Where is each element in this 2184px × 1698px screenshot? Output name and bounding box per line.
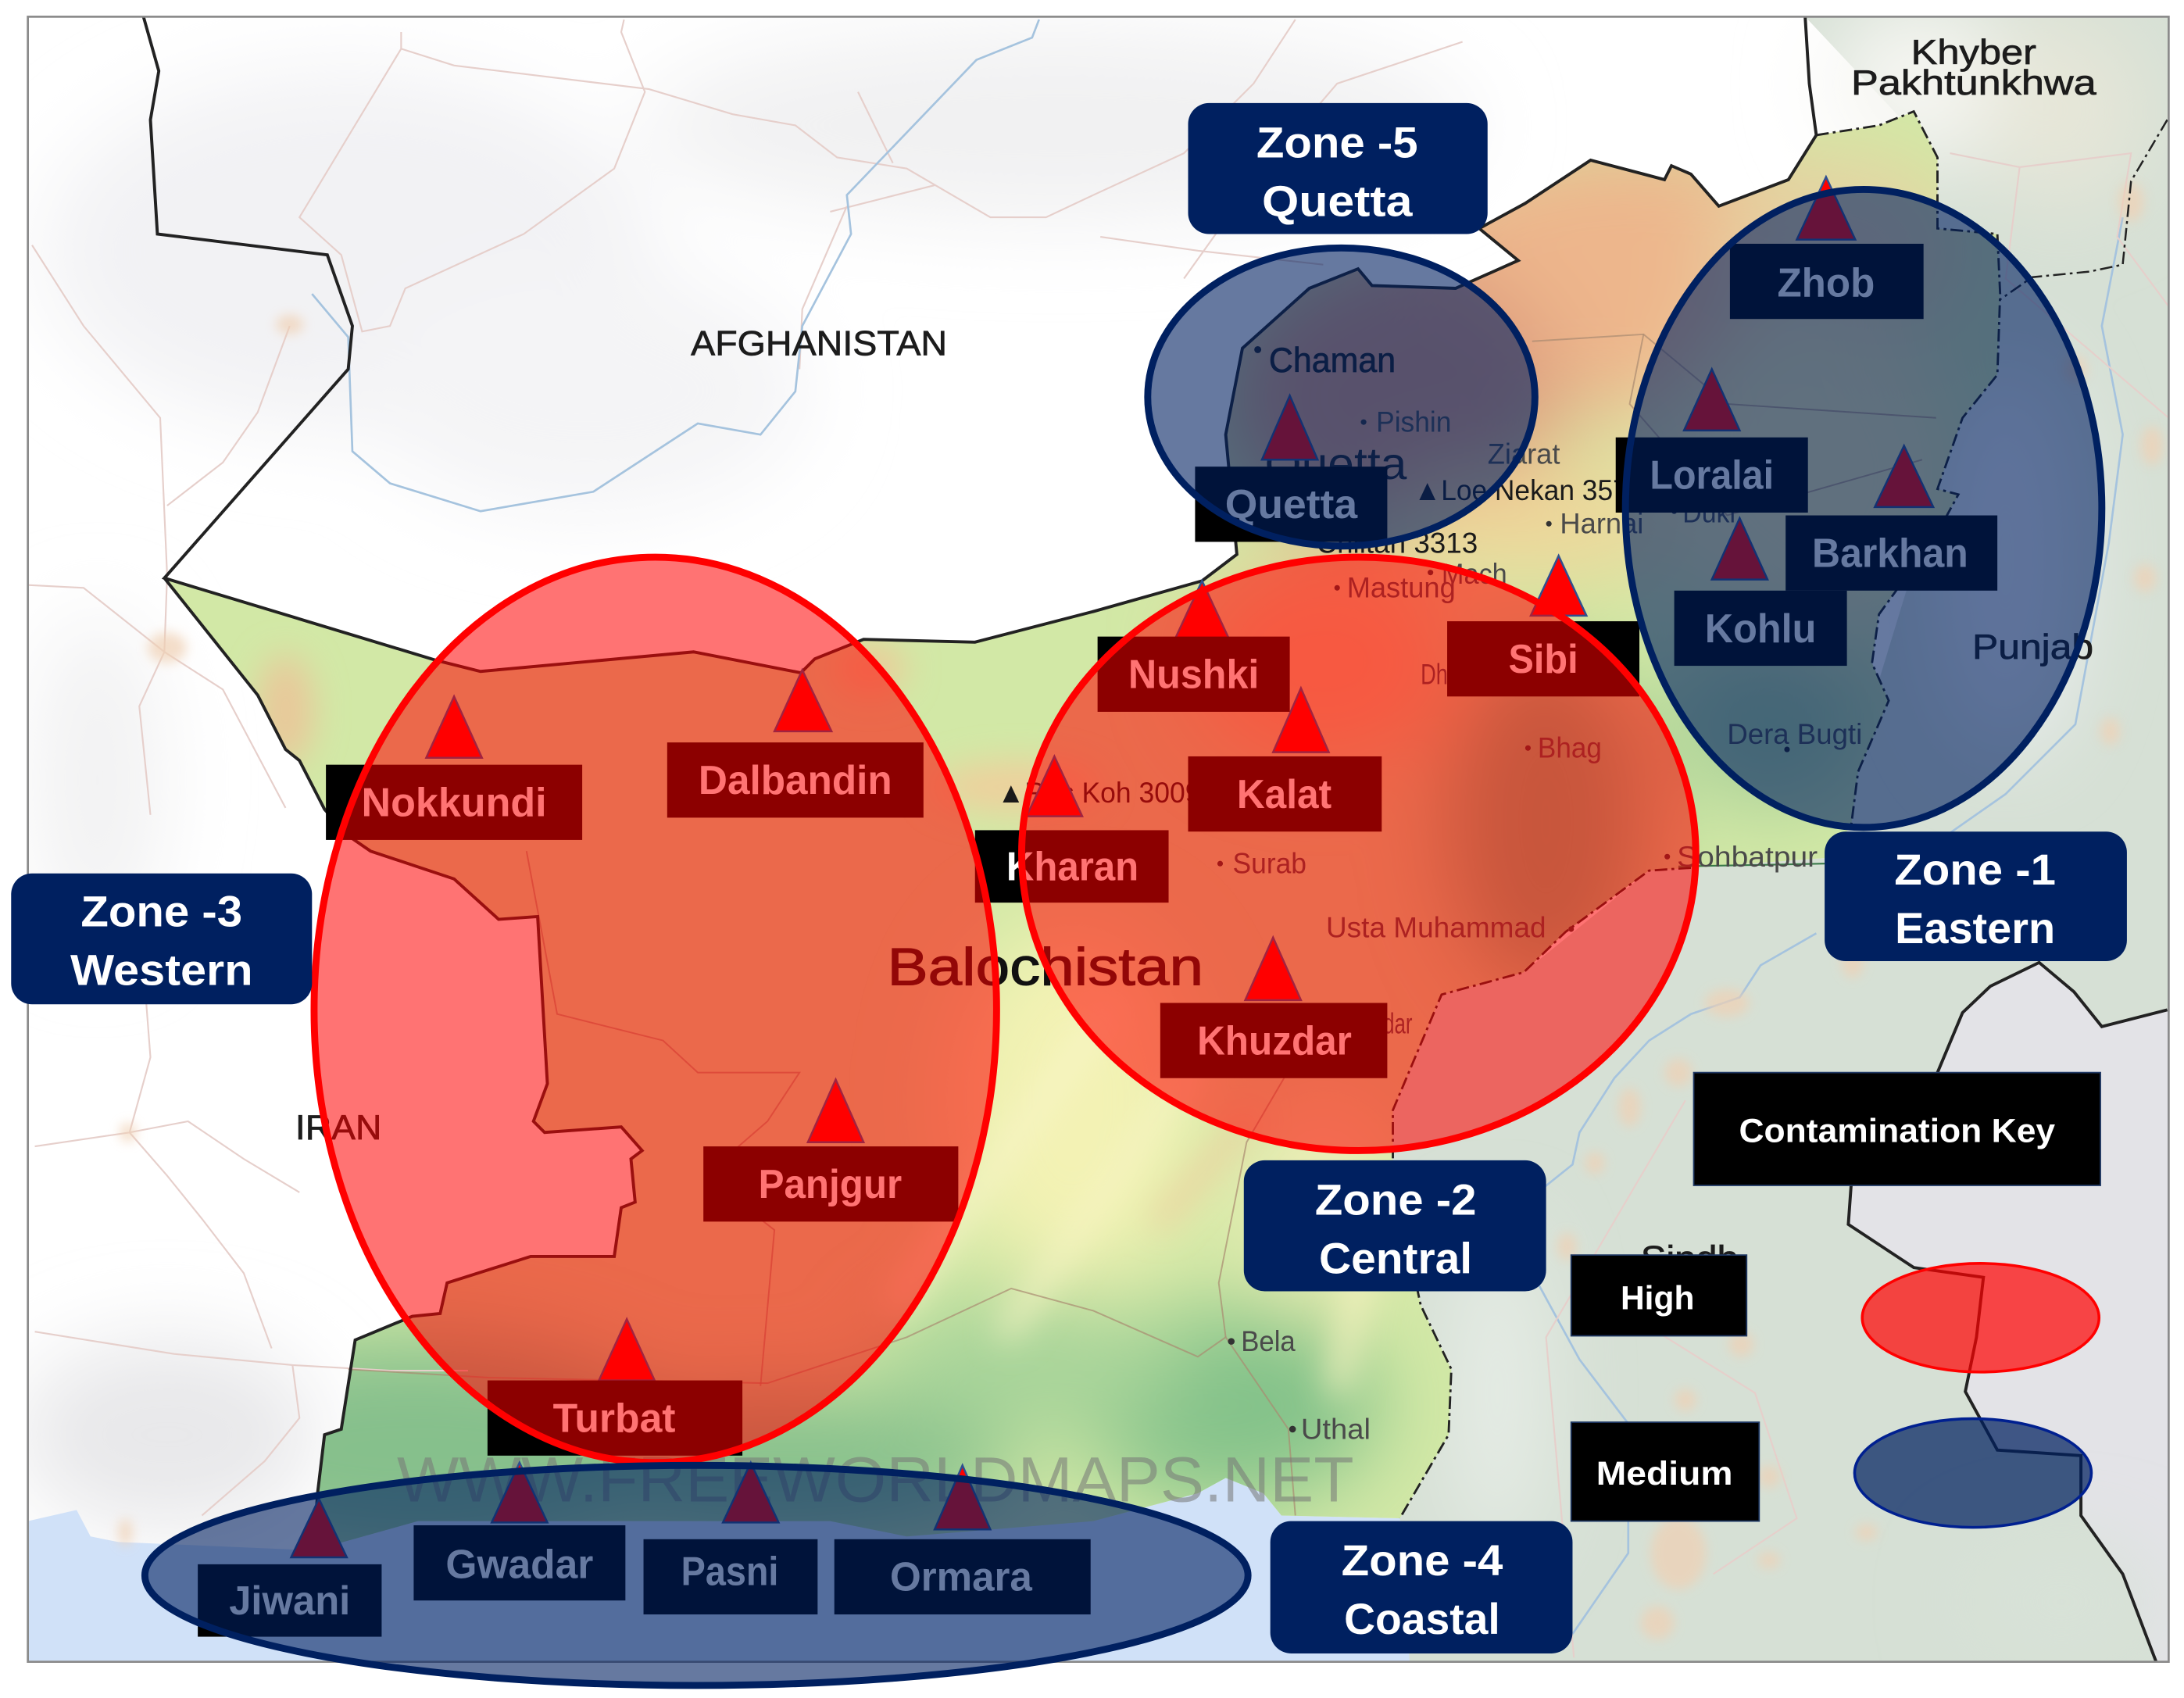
Balochistan terrain — [169, 113, 2000, 1542]
zone label: Zone 4 Coastal — [1271, 1521, 1572, 1653]
zone label: Zone 1 Eastern: Eastern — [1895, 904, 2055, 953]
label: Dalbandin — [667, 742, 924, 817]
label: Panjgur — [703, 1146, 958, 1221]
legend label: Medium: Medium — [1596, 1455, 1732, 1492]
zone label: Zone 3 Western: Zone -3 — [80, 887, 242, 935]
legend swatch: medium ellipse — [1854, 1419, 2091, 1528]
map place names: Bela — [1241, 1324, 1296, 1357]
label: Loralai: Loralai — [1650, 452, 1774, 498]
label: Gwadar: Gwadar — [445, 1542, 593, 1587]
label: Kharan: Kharan — [1006, 844, 1138, 889]
zone label: Zone 2 Central — [1244, 1160, 1546, 1291]
zone label: Zone 3 Western: Western — [70, 946, 253, 994]
label: Sibi — [1447, 621, 1639, 696]
label: Kohlu: Kohlu — [1705, 606, 1816, 651]
legend label: High: High — [1621, 1280, 1694, 1317]
high contamination ellipse: Western zone — [314, 557, 996, 1463]
legend label: Medium — [1571, 1422, 1759, 1521]
label: Nushki — [1098, 637, 1290, 712]
label: Ormara: Ormara — [890, 1554, 1033, 1600]
map place names: Ziarat — [1488, 438, 1560, 470]
label: Ormara — [835, 1539, 1091, 1614]
map place names: Uthal — [1301, 1412, 1371, 1445]
map place names: Mach — [1442, 557, 1507, 590]
zone label: Zone 5 Quetta: Quetta — [1262, 177, 1414, 225]
label: Quetta — [1195, 467, 1387, 542]
map place names: Khyber — [1911, 34, 2036, 72]
label: Dalbandin: Dalbandin — [699, 757, 892, 803]
zone label: Zone 1 Eastern: Zone -1 — [1894, 845, 2056, 894]
map place names: Bhag — [1538, 731, 1602, 764]
label: Pasni — [644, 1539, 817, 1614]
label: Kohlu — [1675, 591, 1847, 666]
label: Zhob: Zhob — [1778, 260, 1875, 306]
label: Kharan — [975, 830, 1169, 903]
zone label: Zone 4 Coastal: Zone -4 — [1342, 1536, 1503, 1585]
map place names: Sohbatpur — [1677, 840, 1818, 873]
label: Kalat — [1188, 756, 1382, 831]
map place names: IRAN — [295, 1109, 381, 1147]
legend swatch: high ellipse — [1862, 1264, 2099, 1372]
map place names: Pakhtunkhwa — [1851, 64, 2096, 102]
medium contamination ellipse: Coastal zone — [145, 1465, 1248, 1685]
map place names: Harnai — [1560, 507, 1643, 540]
label: Nokkundi — [326, 765, 582, 840]
map place names: Dhadar — [1421, 657, 1490, 690]
map place names: Khuzdar — [1337, 1007, 1412, 1040]
high contamination ellipse: Central zone — [1021, 557, 1696, 1150]
map place names: Chaman — [1269, 341, 1396, 380]
label: Kalat: Kalat — [1237, 771, 1331, 817]
label: Nushki: Nushki — [1128, 652, 1259, 697]
map place names: Punjab — [1972, 628, 2093, 667]
label: Pasni: Pasni — [681, 1549, 778, 1594]
map place names: Usta Muhammad — [1326, 911, 1546, 944]
label: Panjgur: Panjgur — [759, 1161, 902, 1206]
map place names: Chiltan 3313 — [1316, 527, 1478, 559]
map place names: ▲Loe Nekan 3578 — [1414, 474, 1643, 506]
label: Nokkundi: Nokkundi — [362, 780, 547, 825]
label: Turbat — [488, 1381, 742, 1456]
label: Turbat: Turbat — [553, 1396, 676, 1441]
label: Quetta: Quetta — [1225, 481, 1358, 527]
zone label: Zone 2 Central: Central — [1319, 1234, 1472, 1282]
label: Khuzdar: Khuzdar — [1197, 1017, 1352, 1063]
zone label: Zone 5 Quetta — [1188, 103, 1488, 234]
map place names: Duki — [1682, 495, 1735, 528]
zone label: Zone 4 Coastal: Coastal — [1344, 1595, 1500, 1643]
map place names — [295, 34, 2096, 1516]
zone label: Zone 5 Quetta: Zone -5 — [1256, 118, 1418, 166]
ocean — [28, 1478, 1410, 1662]
map place names: Surab — [1233, 847, 1306, 880]
map place names: Quetta — [1265, 439, 1407, 489]
land: India — [1848, 963, 2168, 1662]
label: Barkhan — [1785, 516, 1997, 591]
label: Gwadar — [413, 1525, 625, 1600]
map place names: Sindh — [1641, 1240, 1739, 1278]
label: Jiwani: Jiwani — [229, 1578, 350, 1623]
label: Jiwani — [198, 1564, 381, 1637]
zone label: Zone 2 Central: Zone -2 — [1315, 1175, 1476, 1224]
map place names: ▲Ras Koh 3009 — [997, 776, 1201, 809]
map place names: Dera Bugti — [1727, 717, 1862, 750]
medium contamination ellipse: Eastern zone — [1625, 189, 2102, 828]
zone label: Zone 1 Eastern — [1825, 831, 2127, 961]
medium contamination ellipse: Quetta zone — [1148, 248, 1535, 546]
map place names: Balochistan — [887, 938, 1203, 996]
zone label: Zone 3 Western — [11, 874, 312, 1004]
map place names: WWW.FREEWORLDMAPS.NET — [397, 1445, 1354, 1516]
legend label: High — [1571, 1255, 1746, 1336]
legend title: Contamination Key — [1694, 1073, 2100, 1185]
legend title: Contamination Key: Contamination Key — [1739, 1113, 2055, 1150]
map place names: AFGHANISTAN — [691, 325, 947, 363]
map place names: Mastung — [1347, 571, 1456, 604]
label: Zhob — [1730, 244, 1924, 319]
map place names: Pishin — [1376, 406, 1451, 438]
label: Khuzdar — [1160, 1003, 1387, 1078]
site markers: triangles — [291, 177, 1933, 1557]
land: Punjab and Sindh — [1393, 16, 2168, 1662]
label: Sibi: Sibi — [1508, 636, 1578, 681]
label: Barkhan: Barkhan — [1812, 531, 1968, 576]
label: Loralai — [1616, 438, 1808, 513]
